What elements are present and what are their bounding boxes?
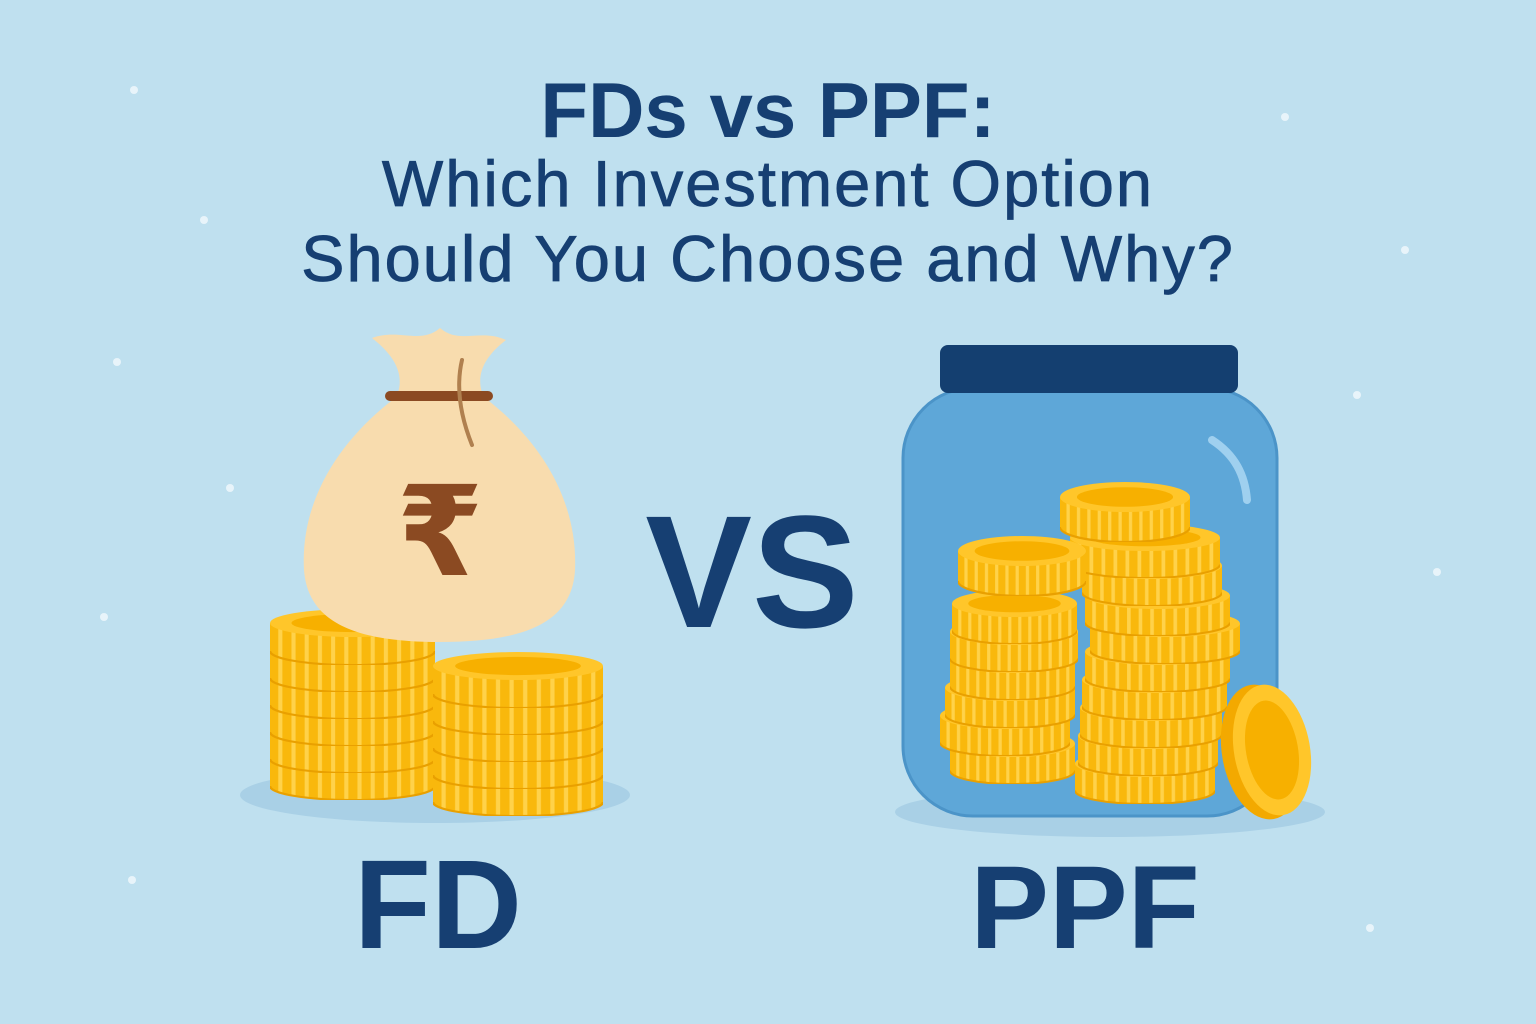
- loose coin: [1211, 678, 1321, 826]
- title line 1: FDs vs PPF:: [540, 66, 996, 154]
- jar lid: [940, 345, 1238, 393]
- subtitle: [301, 147, 1235, 295]
- title: [301, 66, 1235, 295]
- right coin stack: [433, 652, 603, 816]
- label: FD: FD: [354, 834, 522, 975]
- jar body: [903, 388, 1277, 816]
- icon: FD money bag with coins: [240, 328, 630, 823]
- decorative dots: [100, 86, 1441, 932]
- money bag: [304, 328, 575, 642]
- subtitle: Should You Choose and Why?: [301, 222, 1235, 295]
- jar coins: [940, 482, 1240, 804]
- label: PPF: PPF: [970, 842, 1200, 974]
- left coin stack: [270, 609, 435, 800]
- rupee symbol: ₹: [397, 460, 483, 605]
- subtitle: Which Investment Option: [382, 147, 1154, 220]
- VS label: VS: [645, 482, 859, 661]
- icon: PPF jar with coins: [895, 345, 1325, 837]
